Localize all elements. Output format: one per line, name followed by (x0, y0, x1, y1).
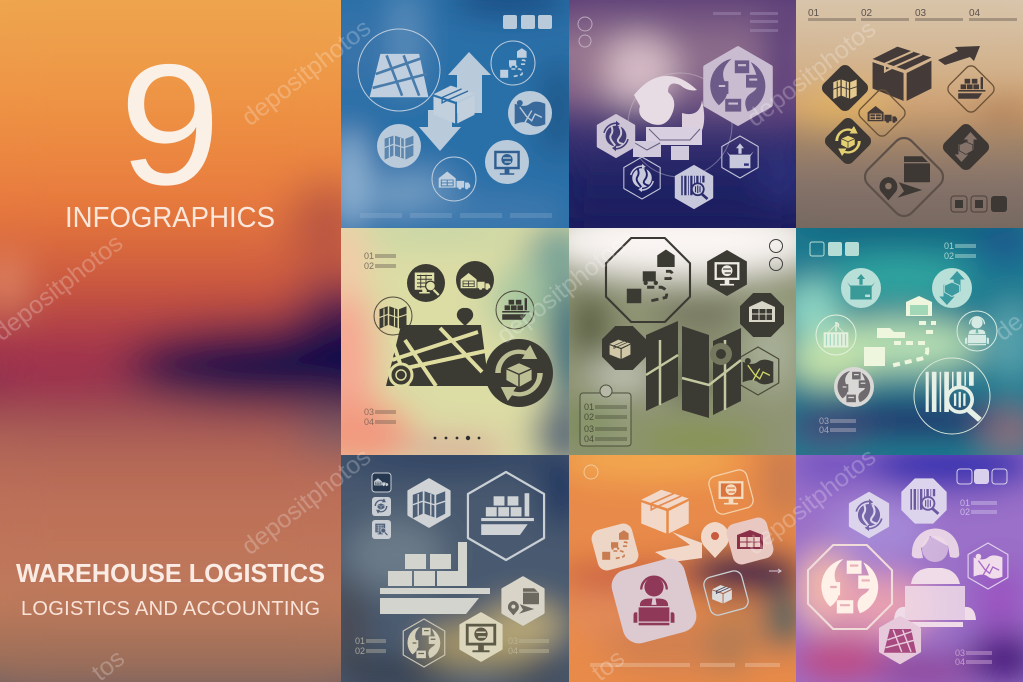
legend: left labels: 01 (355, 636, 365, 646)
icon: recycle box diamond (825, 118, 871, 164)
icon: globe boxes circle (834, 367, 874, 407)
icon: globe outline hexagon (624, 157, 660, 199)
icon: box outline square (702, 569, 750, 617)
icon: monitor outline square (707, 468, 755, 516)
icon: map route hexagon (968, 543, 1008, 589)
legend box: 01 (584, 402, 594, 412)
icon: route circle (491, 41, 535, 85)
legend: top labels: 01 (944, 241, 954, 251)
watermarks: depositphotos (741, 443, 881, 561)
icon: large operator (894, 528, 976, 627)
legend: top labels: 01 (960, 498, 970, 508)
icon: globe rotate hexagon (598, 115, 634, 157)
icons: three small squares (503, 15, 552, 29)
pagination dots (434, 436, 480, 440)
title: infographics: INFOGRAPHICS (65, 202, 275, 234)
icon: pin and arrow (655, 522, 729, 562)
icon: map outline circle (374, 297, 412, 335)
icon: menu button (584, 465, 598, 479)
icon: box octagon (602, 326, 646, 370)
heading: warehouse logistics: WAREHOUSE LOGISTICS (16, 558, 325, 588)
icon: large folded map (646, 321, 741, 418)
legend: right labels: 04 (508, 646, 518, 656)
legend: numbered headers: 04 (969, 8, 981, 19)
icons: small squares (810, 242, 859, 256)
icon: map hexagon (880, 617, 920, 663)
legend: numbered headers (808, 8, 1017, 21)
icon: map route hexagon (737, 347, 779, 395)
legend: bottom labels (819, 416, 856, 435)
legend: faint top labels (713, 12, 778, 32)
icon: box up circle (841, 268, 881, 308)
icon: globe boxes hexagon (403, 619, 445, 667)
icon: invoice magnifier circle (407, 264, 445, 302)
legend: numbered headers: 01 (808, 8, 820, 19)
icon: container circle (816, 315, 856, 355)
icons: menu and info buttons (578, 17, 592, 47)
icon: monitor map hexagon (461, 613, 501, 661)
icon: folded map circle (377, 124, 421, 168)
legend: faint bottom labels (360, 213, 552, 218)
legend: left labels (355, 636, 386, 656)
icon: monitor hexagon (707, 250, 747, 296)
icon: map hexagon (409, 479, 449, 527)
panel: barcode and route, teal (760, 190, 1023, 500)
legend: top labels (364, 252, 396, 269)
icon: box in recycle blob (485, 339, 553, 407)
icons: small side squares (372, 473, 391, 539)
icon: operator circle (957, 311, 997, 351)
legend: bottom labels (955, 648, 992, 667)
icon: road map (386, 325, 490, 386)
icon: large outlined map circle (358, 29, 440, 111)
icon: map pin (457, 308, 473, 326)
legend: bottom labels: 03 (364, 407, 374, 417)
icon: warehouse shelves octagon (740, 293, 784, 337)
legend: bottom labels: 03 (955, 648, 965, 658)
icon: down arrow (419, 110, 461, 151)
watermarks: depositphotos (741, 15, 881, 133)
icon: globe boxes hexagon (705, 48, 771, 124)
panel: ships, slate (300, 420, 610, 682)
icon: warehouse rounded square (726, 517, 774, 565)
icons: menu and info buttons (770, 240, 782, 270)
legend: top labels (944, 241, 976, 261)
icon: warehouse route (864, 296, 936, 366)
legend: top labels (960, 498, 997, 517)
subheading: logistics and accounting: LOGISTICS AND ACCOUNTING (21, 598, 320, 620)
icon: ship outline circle (496, 291, 534, 329)
watermarks: depositphotos (236, 443, 376, 561)
icon: arrow (769, 569, 781, 573)
legend: bottom labels: 04 (955, 657, 965, 667)
icons: small squares (957, 469, 1007, 484)
legend: right labels (508, 636, 549, 656)
legend: faint bottom labels (590, 663, 780, 667)
icon: ship hexagon (468, 472, 544, 560)
panel: folded map, white and olive (530, 190, 830, 500)
icon: arrows box diamond (943, 124, 989, 170)
icon: warehouse circle (432, 157, 476, 201)
icon: map diamond (822, 65, 868, 111)
icon: large globe with boxes (628, 73, 732, 177)
icon: large ship (380, 542, 490, 614)
icon: barcode hexagon (676, 166, 712, 208)
icon: up arrow (448, 52, 491, 113)
legend: bottom labels (364, 408, 396, 425)
watermarks: depositphotos (236, 14, 376, 132)
icon: ship diamond (947, 65, 995, 113)
icon: barcode circle (914, 358, 990, 434)
icon: large box (641, 490, 689, 534)
legend: top labels: 01 (364, 251, 374, 261)
panel: operator, violet (760, 420, 1023, 682)
panel: operator, orange (530, 420, 830, 682)
panel: globe and delivery, purple (569, 0, 813, 228)
icon: arrow (938, 46, 980, 65)
icon: route rounded square (591, 523, 639, 571)
icon: operator rounded square (611, 558, 697, 644)
watermarks: depositphotos (491, 232, 631, 350)
legend box: 04 (584, 434, 594, 444)
icon: monitor circle (485, 140, 529, 184)
icon: box up hexagon (722, 136, 758, 178)
legend: numbered headers: 02 (861, 8, 873, 19)
icon: box and pin diamond (864, 136, 944, 217)
icon: box and pin hexagon (503, 577, 543, 625)
icon: globe hexagon (850, 493, 888, 537)
legend: bottom labels: 04 (819, 425, 829, 435)
icon: target on road map (390, 364, 412, 386)
legend box: 02 (584, 412, 594, 422)
legend: top labels: 02 (944, 251, 954, 261)
legend: left labels: 02 (355, 646, 365, 656)
icon: arrows circle (932, 268, 972, 308)
panel: title cover background (0, 0, 341, 682)
legend: top labels: 02 (960, 507, 970, 517)
icon: barcode hexagon (902, 479, 946, 523)
legend: right labels: 03 (508, 636, 518, 646)
legend: bottom labels: 04 (364, 417, 374, 427)
legend: bottom labels: 03 (819, 416, 829, 426)
icon: map route circle (508, 91, 552, 135)
title number: 9 (119, 29, 221, 221)
icons: small squares (951, 196, 1007, 212)
icon: route octagon (606, 238, 690, 322)
legend box: 03 (584, 424, 594, 434)
icon: warehouse circle (456, 261, 494, 299)
icon: box in centre (433, 86, 475, 123)
panel: road map, pale green (341, 228, 569, 455)
icon: large box (873, 47, 931, 101)
icon: globe boxes octagon (808, 545, 892, 629)
legend: numbered headers: 03 (915, 8, 927, 19)
panel: box and diamonds, beige (795, 0, 1023, 228)
icon: warehouse diamond (858, 89, 906, 137)
legend: top labels: 02 (364, 261, 374, 271)
legend box (580, 385, 631, 446)
panel: warehouse map and arrows, blue (341, 0, 569, 228)
